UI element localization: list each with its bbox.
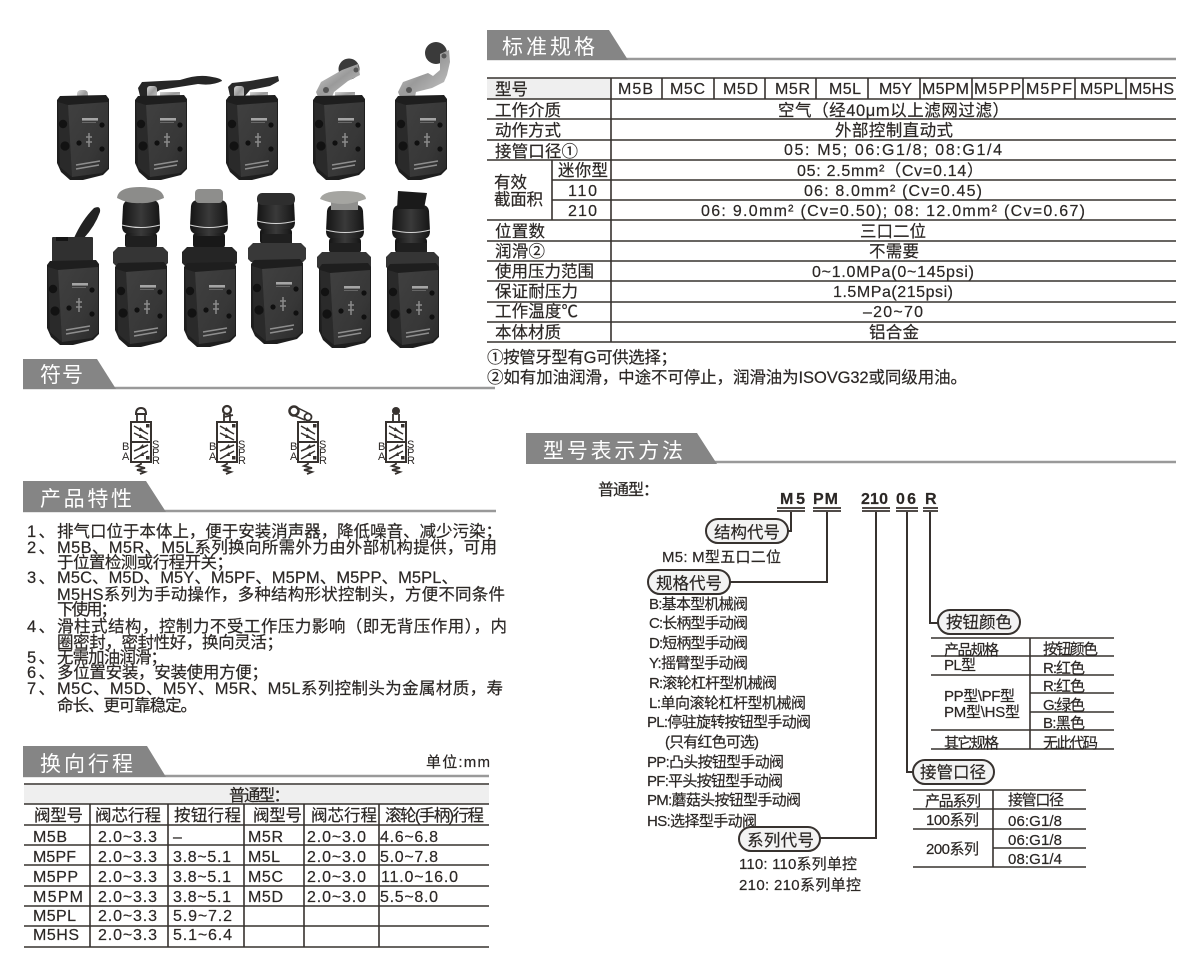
heading: 换向行程 bbox=[23, 746, 489, 777]
spec table: 05: M5; 06:G1/8; 08:G1/4 bbox=[784, 142, 1002, 159]
table: button colours: B:黑色 bbox=[1043, 715, 1085, 732]
callout: 系列代号: 110: 110系列单控 bbox=[739, 856, 857, 873]
heading: 产品特性 bbox=[23, 481, 496, 512]
callout: 系列代号: 210: 210系列单控 bbox=[739, 877, 861, 894]
stroke table: 3.8~5.1 bbox=[173, 889, 231, 906]
callout: 规格代号: L:单向滚轮杠杆型机械阀 bbox=[649, 695, 806, 712]
model code: 210 bbox=[861, 491, 888, 508]
table: port sizes: 200系列 bbox=[926, 841, 979, 858]
photo: M5D short lever valve bbox=[226, 76, 279, 180]
photo: M5PM mushroom button valve bbox=[113, 187, 168, 347]
feature list: M5HS系列为手动操作，多种结构形状控制头，方便不同条件 bbox=[57, 585, 505, 604]
callout: 规格代号: 规格代号 bbox=[656, 574, 722, 593]
spec table: M5PM bbox=[922, 81, 969, 98]
photo: M5PP raised button valve bbox=[182, 189, 237, 347]
feature list: 4、 bbox=[27, 618, 55, 636]
symbol: button with detent: P bbox=[238, 447, 245, 459]
callout: 规格代号: B:基本型机械阀 bbox=[649, 596, 748, 613]
stroke table: 滚轮(手柄)行程 bbox=[385, 806, 484, 825]
stroke table: 2.0~3.3 bbox=[98, 908, 157, 925]
callout: 按钮颜色 bbox=[931, 610, 1114, 752]
photo: M5Y roller arm valve bbox=[313, 58, 365, 180]
feature list: M5C、M5D、M5Y、M5PF、M5PM、M5PP、M5PL、 bbox=[57, 569, 458, 587]
symbol: roller: R bbox=[407, 455, 415, 467]
spec table: 1.5MPa(215psi) bbox=[833, 284, 953, 301]
feature list: 下使用； bbox=[57, 600, 117, 619]
table: button colours: PL型 bbox=[944, 657, 976, 674]
callout: 规格代号: PF:平头按钮型手动阀 bbox=[647, 773, 783, 790]
heading: 换向行程: 换向行程 bbox=[40, 753, 133, 776]
symbol: button with detent: S bbox=[238, 439, 245, 451]
stroke table: 11.0~16.0 bbox=[381, 869, 458, 886]
spec table: 润滑② bbox=[495, 242, 545, 261]
spec table: 保证耐压力 bbox=[495, 282, 578, 301]
stroke table: 3.8~5.1 bbox=[173, 849, 231, 866]
symbol: roller lever: A bbox=[290, 451, 298, 463]
spec table: 210 bbox=[568, 203, 597, 220]
table: button colours: R:红色 bbox=[1043, 660, 1085, 677]
photo: M5B plunger valve bbox=[57, 90, 109, 180]
callout: 规格代号 bbox=[647, 570, 811, 830]
symbol: button with detent: R bbox=[238, 455, 246, 467]
model code: PM bbox=[813, 491, 838, 508]
spec table: 动作方式 bbox=[495, 121, 561, 140]
symbol: roller: A bbox=[378, 451, 386, 463]
panel: product features bbox=[23, 481, 507, 715]
photo: M5PF flat button valve bbox=[248, 193, 306, 344]
symbol: button with detent bbox=[209, 406, 246, 474]
stroke table: 2.0~3.0 bbox=[307, 829, 366, 846]
table: button colours: PM型\HS型 bbox=[944, 704, 1020, 721]
symbol: button with detent: A bbox=[209, 451, 217, 463]
spec table: M5Y bbox=[879, 81, 912, 98]
connector lines bbox=[730, 512, 938, 838]
spec table: M5L bbox=[829, 81, 861, 98]
stroke table: M5B bbox=[33, 829, 67, 846]
feature list: 多位置安装，安装使用方便； bbox=[57, 663, 268, 682]
symbol: roller lever: R bbox=[319, 455, 327, 467]
feature list: 5、 bbox=[27, 649, 55, 667]
spec table: –20~70 bbox=[863, 304, 923, 321]
stroke table: 5.1~6.4 bbox=[173, 927, 232, 944]
callout: 结构代号 bbox=[662, 519, 788, 566]
photo: M5PL flap valve bbox=[47, 207, 100, 345]
table: port sizes: 06:G1/8 bbox=[1008, 832, 1062, 849]
spec table: 外部控制直动式 bbox=[835, 121, 953, 140]
spec table: 06: 9.0mm² (Cv=0.50); 08: 12.0mm² (Cv=0.67) bbox=[701, 203, 1085, 220]
callout: 规格代号: (只有红色可选) bbox=[665, 734, 759, 751]
symbol: plunger bbox=[122, 408, 160, 474]
symbol: roller bbox=[378, 407, 415, 474]
heading: 产品特性: 产品特性 bbox=[40, 488, 132, 511]
symbol: roller: P bbox=[407, 447, 414, 459]
callout: 结构代号: M5: M型五口二位 bbox=[662, 549, 781, 566]
footnotes bbox=[487, 348, 967, 387]
stroke table: 阀芯行程 bbox=[311, 806, 377, 825]
feature list: M5B、M5R、M5L系列换向所需外力由外部机构提供，可用 bbox=[57, 538, 497, 557]
callout: 规格代号: C:长柄型手动阀 bbox=[649, 615, 748, 632]
panel: symbols bbox=[23, 359, 495, 474]
spec table: 接管口径① bbox=[495, 142, 578, 161]
stroke table: 4.6~6.8 bbox=[380, 829, 438, 846]
stroke table: 阀型号 bbox=[34, 806, 83, 825]
heading: 标准规格: 标准规格 bbox=[502, 36, 595, 59]
stroke table: 5.0~7.8 bbox=[380, 849, 438, 866]
stroke table: 5.9~7.2 bbox=[173, 908, 232, 925]
stroke table: 普通型： bbox=[229, 786, 290, 805]
table: button colours bbox=[931, 638, 1114, 752]
callout: 系列代号: 系列代号 bbox=[747, 831, 814, 850]
symbol: roller: B bbox=[378, 441, 385, 453]
stroke table: 5.5~8.0 bbox=[380, 889, 438, 906]
table: button colours: 按钮颜色 bbox=[1043, 641, 1098, 658]
table: button colours: 其它规格 bbox=[944, 734, 999, 752]
heading: 型号表示方法 bbox=[526, 433, 1176, 464]
spec table: M5PF bbox=[1026, 81, 1072, 98]
symbol: plunger: A bbox=[122, 451, 130, 463]
footnotes: ②如有加油润滑，中途不可停止，润滑油为ISOVG32或同级用油。 bbox=[487, 368, 967, 387]
symbol: roller lever bbox=[290, 406, 327, 474]
unit label: 单位:mm bbox=[426, 754, 490, 771]
spec table: M5C bbox=[670, 81, 705, 98]
spec table: M5B bbox=[618, 81, 653, 98]
stroke table: M5C bbox=[248, 869, 283, 886]
photo: M5R roller lever valve bbox=[395, 42, 450, 180]
stroke table bbox=[24, 784, 489, 947]
model code: 06 bbox=[896, 491, 916, 508]
table: button colours: G:绿色 bbox=[1043, 697, 1085, 714]
callout: 规格代号: Y:摇臂型手动阀 bbox=[649, 655, 748, 672]
spec table: 工作温度℃ bbox=[495, 302, 578, 321]
panel: model designation bbox=[526, 433, 1176, 894]
heading: 标准规格 bbox=[487, 30, 1176, 60]
stroke table: M5PP bbox=[33, 869, 78, 886]
callout: 规格代号: D:短柄型手动阀 bbox=[649, 635, 748, 652]
spec table: 0~1.0MPa(0~145psi) bbox=[812, 264, 974, 281]
stroke table: 2.0~3.0 bbox=[307, 849, 366, 866]
symbol: plunger: B bbox=[122, 441, 129, 453]
callout: 按钮颜色: 按钮颜色 bbox=[946, 613, 1012, 632]
spec table: 空气（经40μm以上滤网过滤） bbox=[778, 101, 1009, 120]
symbol: plunger: S bbox=[152, 439, 159, 451]
label: 普通型: 普通型： bbox=[598, 481, 659, 499]
spec table: 位置数 bbox=[495, 222, 546, 241]
table: port sizes: 06:G1/8 bbox=[1008, 813, 1062, 830]
spec table: 110 bbox=[568, 183, 597, 200]
spec table: M5R bbox=[775, 81, 810, 98]
feature list: 3、 bbox=[27, 569, 55, 587]
symbol: plunger: P bbox=[152, 447, 159, 459]
feature list: 圈密封，密封性好，换向灵活； bbox=[57, 633, 283, 652]
stroke table: 2.0~3.3 bbox=[98, 927, 157, 944]
spec table: 06: 8.0mm² (Cv=0.45) bbox=[804, 183, 982, 200]
spec table: 工作介质 bbox=[495, 101, 561, 120]
model code: R bbox=[925, 491, 937, 508]
footnotes: ①按管牙型有G可供选择； bbox=[487, 348, 677, 367]
callout: 结构代号: 结构代号 bbox=[714, 523, 780, 542]
stroke table: 2.0~3.0 bbox=[307, 889, 366, 906]
table: port sizes: 产品系列 bbox=[925, 793, 981, 810]
symbol: roller lever: P bbox=[319, 447, 326, 459]
callout: 接管口径: 接管口径 bbox=[920, 763, 986, 782]
feature list: 命长、更可靠稳定。 bbox=[57, 696, 197, 715]
feature list: 7、 bbox=[27, 680, 55, 698]
callout: 规格代号: R:滚轮杠杆型机械阀 bbox=[649, 675, 777, 692]
callout: 规格代号: HS:选择型手动阀 bbox=[647, 813, 757, 830]
callout: 系列代号 bbox=[739, 827, 861, 894]
stroke table: – bbox=[173, 829, 182, 846]
stroke table: 阀型号 bbox=[253, 806, 302, 825]
stroke table: M5HS bbox=[33, 927, 79, 944]
table: port sizes: 接管口径 bbox=[1008, 792, 1064, 809]
spec table: 本体材质 bbox=[495, 323, 561, 342]
feature list: 2、 bbox=[27, 539, 55, 557]
heading: 符号 bbox=[23, 359, 495, 389]
panel: product photos bbox=[47, 42, 450, 348]
stroke table: 2.0~3.3 bbox=[98, 849, 157, 866]
panel: standard specifications bbox=[487, 30, 1176, 387]
stroke table: 按钮行程 bbox=[174, 806, 241, 825]
feature list: 排气口位于本体上，便于安装消声器，降低噪音、减少污染； bbox=[57, 522, 502, 541]
feature list: 于位置检测或行程开关； bbox=[57, 553, 233, 572]
feature list: 无需加油润滑； bbox=[57, 648, 167, 667]
feature list: 1、 bbox=[27, 523, 55, 541]
callout: 规格代号: PM:蘑菇头按钮型手动阀 bbox=[647, 792, 801, 809]
table: button colours: R:红色 bbox=[1043, 678, 1085, 695]
photo: M5HS selector valve bbox=[386, 191, 439, 348]
stroke table: 2.0~3.3 bbox=[98, 889, 157, 906]
spec table: 迷你型 bbox=[558, 161, 608, 180]
stroke table: 2.0~3.3 bbox=[98, 869, 157, 886]
callout: 规格代号: PP:凸头按钮型手动阀 bbox=[647, 754, 784, 771]
photo: M5PM pale mushroom button valve bbox=[317, 191, 371, 348]
table: port sizes: 100系列 bbox=[926, 812, 979, 829]
spec table: 有效 bbox=[494, 173, 527, 192]
stroke table: M5PM bbox=[33, 889, 83, 906]
panel: switching stroke bbox=[23, 746, 490, 947]
spec table: M5PP bbox=[974, 81, 1021, 98]
stroke table: M5PL bbox=[33, 908, 76, 925]
stroke table: 2.0~3.0 bbox=[307, 869, 366, 886]
stroke table: 3.8~5.1 bbox=[173, 869, 231, 886]
spec table bbox=[487, 78, 1176, 342]
feature list: 滑柱式结构，控制力不受工作压力影响（即无背压作用），内 bbox=[57, 617, 507, 636]
stroke table: M5R bbox=[248, 829, 283, 846]
stroke table: 阀芯行程 bbox=[95, 806, 161, 825]
table: port sizes bbox=[913, 790, 1086, 868]
symbol: roller lever: B bbox=[290, 441, 297, 453]
heading: 符号: 符号 bbox=[40, 364, 83, 387]
spec table: M5D bbox=[723, 81, 758, 98]
spec table: 截面积 bbox=[494, 190, 543, 209]
spec table: 不需要 bbox=[869, 243, 919, 261]
symbol: roller lever: S bbox=[319, 439, 326, 451]
stroke table: 2.0~3.3 bbox=[98, 829, 157, 846]
stroke table: M5PF bbox=[33, 849, 76, 866]
table: button colours: 无此代码 bbox=[1043, 735, 1098, 752]
symbol: button with detent: B bbox=[209, 441, 216, 453]
model code bbox=[777, 491, 938, 511]
spec table: 05: 2.5mm²（Cv=0.14） bbox=[797, 162, 983, 180]
table: button colours: 产品规格 bbox=[944, 642, 999, 659]
table: button colours: PP型\PF型 bbox=[944, 688, 1015, 705]
table: port sizes: 08:G1/4 bbox=[1008, 851, 1062, 868]
model code: M5 bbox=[780, 491, 805, 508]
spec table: 型号 bbox=[495, 80, 528, 99]
photo: M5C long lever valve bbox=[135, 76, 222, 180]
feature list: 6、 bbox=[27, 664, 55, 682]
stroke table: M5L bbox=[248, 849, 280, 866]
feature list: M5C、M5D、M5Y、M5R、M5L系列控制头为金属材质，寿 bbox=[57, 679, 503, 698]
feature list bbox=[27, 522, 507, 715]
spec table: 三口二位 bbox=[860, 222, 926, 241]
spec table: M5HS bbox=[1129, 81, 1174, 98]
callout: 接管口径 bbox=[913, 760, 1086, 868]
heading: 型号表示方法: 型号表示方法 bbox=[543, 440, 683, 463]
callout: 规格代号: PL:停驻旋转按钮型手动阀 bbox=[647, 714, 811, 731]
spec table: 铝合金 bbox=[869, 323, 920, 342]
symbol: plunger: R bbox=[152, 455, 160, 467]
spec table: M5PL bbox=[1080, 81, 1123, 98]
spec table: 使用压力范围 bbox=[495, 262, 594, 281]
stroke table: M5D bbox=[248, 889, 283, 906]
symbol: roller: S bbox=[407, 439, 414, 451]
